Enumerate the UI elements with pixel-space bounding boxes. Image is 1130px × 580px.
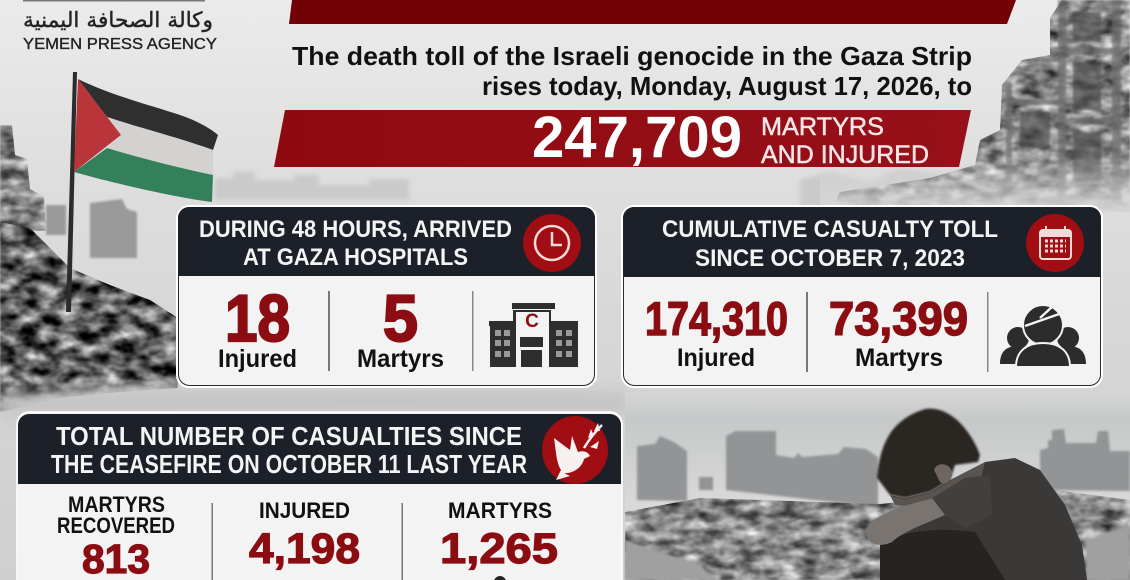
photo: boy in the ruins <box>625 392 1130 580</box>
stat: 174,310 injured: Injured <box>677 344 755 372</box>
panel: during 48 hours <box>177 206 596 387</box>
logo: Yemen Press Agency: وكالة الصحافة اليمنية <box>23 8 213 32</box>
background: ruined building upper right <box>820 0 1130 212</box>
heading text: AT GAZA HOSPITALS <box>243 244 468 271</box>
text: death toll headline: rises today, Monday, August 17, 2026, to <box>482 71 972 101</box>
stat: 18 injured: Injured <box>218 345 297 373</box>
heading text: TOTAL NUMBER OF CASUALTIES SINCE <box>56 421 522 451</box>
background: fog between panels <box>0 388 630 414</box>
boy figure <box>866 409 1087 580</box>
banner: total toll <box>274 105 971 170</box>
heading text: THE CEASEFIRE ON OCTOBER 11 LAST YEAR <box>51 449 527 479</box>
logo: Yemen Press Agency: YEMEN PRESS AGENCY <box>23 36 217 53</box>
background: distant foggy skyline <box>215 166 1000 210</box>
panel header <box>18 414 621 484</box>
stat: injured 4,198 <box>249 498 360 573</box>
stat: martyrs recovered 813: MARTYRS <box>68 492 165 517</box>
heading text <box>662 216 998 272</box>
stat: 73,399 martyrs <box>829 292 968 372</box>
stat: martyrs recovered 813 <box>57 492 175 580</box>
stat: martyrs 1,265 <box>440 498 558 580</box>
stat: 174,310 injured <box>645 292 788 372</box>
background: rubble and building on the left <box>0 125 178 430</box>
text: death toll headline: The death toll of the Israeli genocide in the Gaza Strip <box>292 41 972 71</box>
top red banner <box>289 0 1016 24</box>
icon: Palestinian flag <box>66 72 218 312</box>
heading text: SINCE OCTOBER 7, 2023 <box>695 245 965 272</box>
rubble field <box>625 488 1130 580</box>
stat: injured 4,198: 4,198 <box>249 525 360 573</box>
stat: 5 martyrs: Martyrs <box>357 345 444 373</box>
panel header <box>623 207 1101 277</box>
icon: injured group <box>1000 305 1086 367</box>
heading text <box>51 421 527 479</box>
stat: martyrs recovered 813: RECOVERED <box>57 513 175 538</box>
icon: clock <box>523 214 581 272</box>
heading text <box>199 216 512 271</box>
icon: calendar <box>1026 214 1084 272</box>
heading text: DURING 48 HOURS, ARRIVED <box>199 216 512 243</box>
text: death toll headline <box>292 41 972 101</box>
icon: dove with olive branch <box>542 416 608 484</box>
stat: 5 martyrs <box>357 281 444 373</box>
logo: Yemen Press Agency <box>23 0 217 53</box>
banner: total toll: 247,709 <box>532 105 742 170</box>
stat: 73,399 martyrs: Martyrs <box>855 344 943 372</box>
distant ruined buildings <box>637 429 1130 507</box>
icon: hospital <box>489 303 578 367</box>
stat: injured 4,198: INJURED <box>259 498 350 523</box>
stat: 18 injured: 18 <box>225 281 290 355</box>
panel header <box>178 207 595 276</box>
banner: total toll: AND INJURED <box>761 141 929 169</box>
stat: 5 martyrs: 5 <box>383 281 418 355</box>
banner: total toll: MARTYRS <box>761 113 884 141</box>
heading text: CUMULATIVE CASUALTY TOLL <box>662 216 998 243</box>
stat: 73,399 martyrs: 73,399 <box>829 292 968 345</box>
stat: martyrs 1,265: MARTYRS <box>448 498 552 523</box>
panel: cumulative toll <box>622 206 1102 387</box>
panel: casualties since ceasefire <box>17 412 622 580</box>
stat: 174,310 injured: 174,310 <box>645 292 788 345</box>
stat: martyrs 1,265: 1,265 <box>440 525 558 573</box>
icon: hospital: C <box>525 311 539 332</box>
